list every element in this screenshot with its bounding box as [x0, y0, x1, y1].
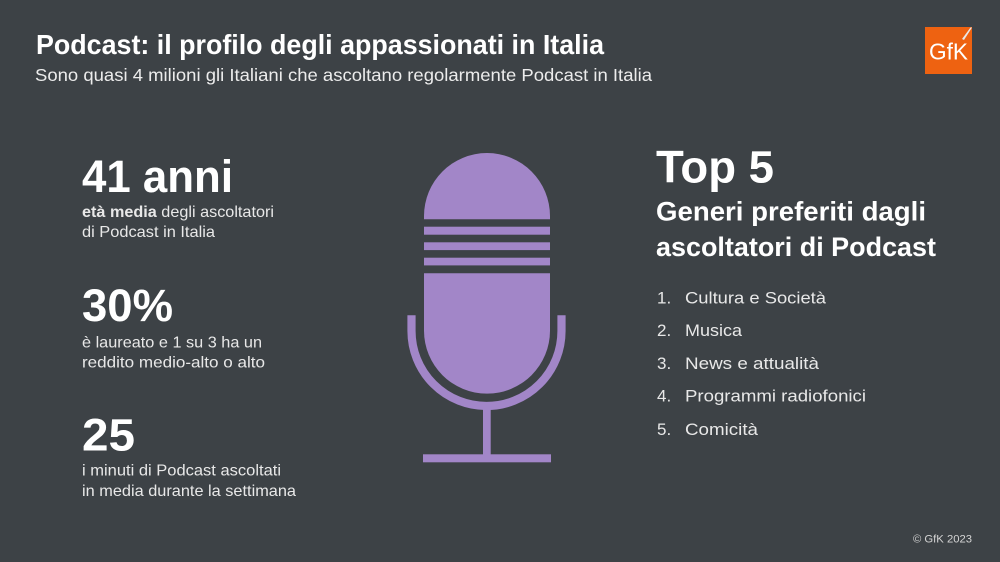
stat: minutes: i minuti di Podcast ascoltati — [82, 462, 281, 480]
stat: graduates: 30% — [82, 280, 173, 331]
list: top genres: 3. — [657, 354, 671, 373]
list: top genres: Programmi radiofonici — [685, 386, 866, 406]
logo: GfK: GfK — [929, 38, 969, 64]
stat: graduates — [82, 280, 265, 372]
heading: preferred genres: ascoltatori di Podcast — [656, 232, 936, 262]
stat: minutes: in media durante la settimana — [82, 483, 296, 500]
stat: age: 41 anni — [82, 151, 233, 202]
stat: graduates: è laureato e 1 su 3 ha un — [82, 334, 262, 352]
heading: preferred genres: Generi preferiti dagli — [656, 196, 926, 226]
subtitle: Sono quasi 4 milioni gli Italiani che ascoltano regolarmente Podcast in Italia — [35, 65, 652, 85]
list: top genres: 1. — [657, 288, 671, 308]
stat: age: età media degli ascoltatori — [82, 204, 274, 221]
copyright: © GfK 2023 — [913, 534, 972, 546]
icon: microphone — [412, 153, 562, 462]
list: top genres: Cultura e Società — [685, 288, 827, 308]
list: top genres: 5. — [657, 420, 671, 439]
stat: age: di Podcast in Italia — [82, 224, 215, 241]
heading: preferred genres — [656, 196, 936, 262]
heading: top 5: Top 5 — [656, 142, 774, 192]
title: Podcast: il profilo degli appassionati in Italia — [36, 29, 604, 60]
list: top genres: News e attualità — [685, 354, 820, 373]
list: top genres — [657, 288, 866, 439]
logo: GfK — [925, 27, 972, 74]
stat: minutes: 25 — [82, 410, 135, 460]
list: top genres: Comicità — [685, 420, 759, 439]
stat: minutes — [82, 410, 296, 500]
list: top genres: Musica — [685, 321, 743, 340]
list: top genres: 2. — [657, 321, 671, 340]
stat: graduates: reddito medio-alto o alto — [82, 354, 265, 372]
list: top genres: 4. — [657, 386, 671, 406]
stat: age — [82, 151, 274, 241]
